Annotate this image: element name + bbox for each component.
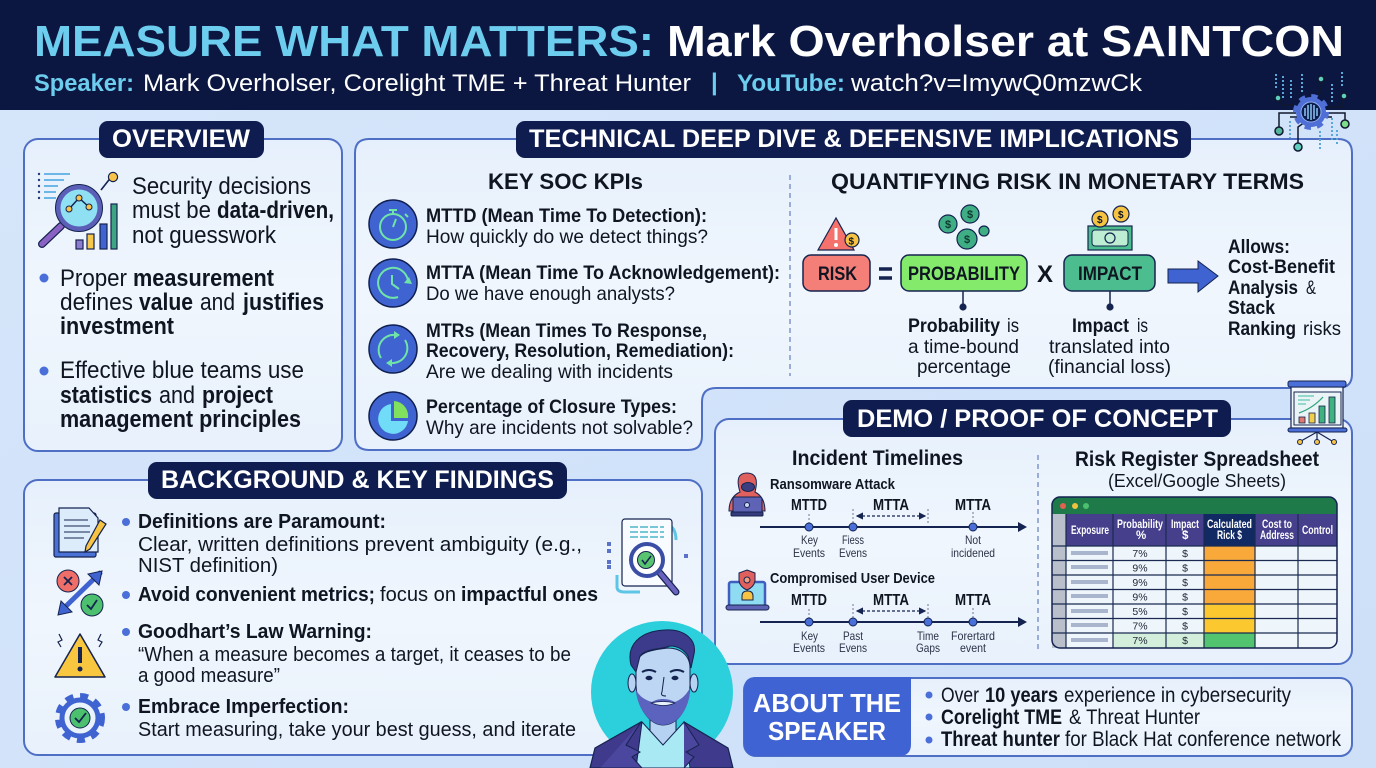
heading: key soc kpis: KEY SOC KPIs (488, 169, 643, 194)
heading: risk register: (Excel/Google Sheets) (1108, 471, 1286, 491)
finding: imperfection: Start measuring, take your best guess, and iterate (138, 719, 576, 741)
text: allows: Ranking (1228, 318, 1296, 340)
timeline: ransomware: Fiess (842, 533, 864, 547)
icon: document review (607, 519, 688, 592)
subtitle: Mark Overholser, Corelight TME + Threat Hunter (143, 70, 691, 97)
bio bullets (926, 684, 1341, 751)
text: allows: Analysis (1228, 277, 1298, 299)
table header labels: Address (1260, 530, 1294, 542)
icon: probability coins (939, 205, 989, 249)
icon: impact money: $ (1097, 215, 1103, 226)
timeline: compromised device: Events (793, 641, 825, 655)
box: impact (1064, 255, 1155, 291)
kpi: mttd (426, 205, 708, 248)
kpi: mtrs (426, 320, 734, 383)
icon: probability coins: $ (967, 209, 973, 221)
bullet: effective blue teams: statistics (60, 382, 152, 409)
table row values (1132, 548, 1188, 647)
text: impact note (1048, 315, 1171, 378)
timeline: compromised device: Gaps (916, 641, 940, 655)
table header labels: $ (1182, 530, 1189, 542)
heading: about the speaker: ABOUT THE (753, 688, 901, 718)
table header labels: % (1136, 530, 1146, 542)
finding: definitions: Definitions are Paramount: (138, 511, 386, 533)
timeline: compromised device: Forertard (951, 629, 995, 643)
bullet: effective blue teams: project (202, 382, 273, 409)
table header labels: Control (1302, 525, 1333, 537)
subtitle: | (711, 69, 718, 96)
kpi: mtta: Do we have enough analysts? (426, 283, 675, 305)
timeline: ransomware: Events (793, 546, 825, 560)
table row values: 7% (1132, 620, 1148, 632)
icon: stopwatch (369, 200, 417, 248)
text: overview intro: not guesswork (132, 222, 277, 249)
table header labels: Exposure (1071, 525, 1109, 537)
title: MEASURE WHAT MATTERS: (34, 17, 654, 66)
timeline: ransomware (760, 497, 1027, 560)
panel: background and key findings (24, 462, 702, 755)
finding: goodhart: Goodhart’s Law Warning: (138, 621, 372, 643)
box: impact: IMPACT (1078, 264, 1142, 285)
timeline: ransomware: MTTA (873, 497, 909, 514)
heading: incident timelines: Incident Timelines (792, 447, 963, 470)
finding: goodhart: “When a measure becomes a target, it ceases to be (138, 644, 571, 666)
timeline: compromised device: Evens (839, 641, 867, 655)
table row values: 7% (1132, 635, 1148, 647)
text: overview intro (132, 173, 334, 249)
table row values: $ (1182, 635, 1188, 647)
icon: probability coins: $ (964, 234, 970, 246)
table row values: 7% (1132, 548, 1148, 560)
bio bullets: 10 years (985, 684, 1058, 707)
title: Mark Overholser at SAINTCON (667, 17, 1344, 66)
heading: risk register: Risk Register Spreadsheet (1075, 448, 1319, 471)
bio bullets: experience in cybersecurity (1064, 684, 1291, 707)
panel: about the speaker (744, 677, 1352, 756)
icon: hacker (729, 473, 765, 516)
heading: overview (99, 121, 264, 158)
text: overview intro: Security decisions (132, 173, 311, 200)
box: probability (901, 255, 1027, 291)
subtitle: watch?v=ImywQ0mzwCk (850, 70, 1143, 97)
timeline: ransomware: MTTA (955, 497, 991, 514)
table row values: $ (1182, 548, 1188, 560)
timeline: compromised device: Key (801, 629, 818, 643)
header banner (0, 0, 1376, 110)
bullet: effective blue teams: and (159, 382, 195, 409)
label: ransomware attack: Ransomware Attack (770, 476, 896, 493)
icon: gear check (58, 696, 102, 740)
icon: gear circuit (1275, 72, 1349, 151)
heading: quantifying risk: QUANTIFYING RISK IN MONETARY TERMS (831, 169, 1304, 194)
icon: presentation monitor (1288, 381, 1347, 444)
icon: impact money (1088, 206, 1132, 250)
icon: risk warning (818, 218, 859, 250)
table row values: 5% (1132, 606, 1148, 618)
text: allows: Allows: (1228, 236, 1290, 258)
heading: about the speaker (744, 677, 911, 756)
finding: imperfection: Embrace Imperfection: (138, 696, 349, 718)
timeline: ransomware: incidened (951, 546, 995, 560)
table row values: 9% (1132, 577, 1148, 589)
finding: definitions (122, 511, 582, 577)
panel: demo proof of concept (715, 400, 1352, 664)
timeline: ransomware: MTTD (791, 497, 827, 514)
finding: convenient metrics (122, 584, 598, 606)
icon: impact money: $ (1118, 210, 1124, 221)
timeline: compromised device: Time (917, 629, 939, 643)
operator: equals (879, 269, 892, 278)
table header labels (1071, 519, 1333, 542)
kpi: mtrs: Recovery, Resolution, Remediation): (426, 340, 734, 362)
table row values: 9% (1132, 562, 1148, 574)
heading: demo (843, 400, 1231, 437)
text: allows (1228, 236, 1341, 340)
timeline: ransomware: Key (801, 533, 818, 547)
connector: impact (1106, 291, 1114, 311)
icon: risk warning: $ (848, 236, 854, 248)
kpi: closure types: Percentage of Closure Types: (426, 396, 677, 418)
finding: convenient metrics: focus on (380, 584, 456, 606)
finding: definitions: NIST definition) (138, 555, 278, 577)
heading: risk register (1075, 448, 1319, 491)
connector: probability (959, 291, 967, 311)
operator: multiply: X (1037, 261, 1053, 288)
table row values: $ (1182, 620, 1188, 632)
heading: background: BACKGROUND & KEY FINDINGS (161, 466, 554, 494)
table row values: $ (1182, 577, 1188, 589)
bullet: proper measurement (40, 265, 324, 340)
timeline: ransomware: Evens (839, 546, 867, 560)
table row values: 9% (1132, 592, 1148, 604)
heading: technical deep dive: TECHNICAL DEEP DIVE & DEFENSIVE IMPLICATIONS (529, 125, 1179, 153)
finding: imperfection (122, 696, 576, 741)
kpi: closure types: Why are incidents not solvable? (426, 417, 693, 439)
table header labels: Probability (1117, 519, 1163, 531)
text: probability note: Probability (908, 315, 1000, 337)
icon: magnifier and chart (38, 172, 118, 249)
heading: about the speaker: SPEAKER (768, 716, 886, 746)
finding: convenient metrics: Avoid convenient metrics; (138, 584, 375, 606)
table: risk register spreadsheet (1052, 497, 1337, 648)
bullet: proper measurement: justifies (242, 289, 324, 316)
arrow: result (1168, 261, 1218, 292)
kpi: mtta: MTTA (Mean Time To Acknowledgement): (426, 262, 780, 284)
text: probability note: a time-bound (908, 336, 1019, 358)
box: risk (803, 255, 870, 291)
bullet: proper measurement: and (200, 289, 235, 316)
portrait: speaker (590, 621, 733, 768)
kpi: mttd: MTTD (Mean Time To Detection): (426, 205, 707, 227)
table row values: $ (1182, 606, 1188, 618)
finding: definitions: Clear, written definitions prevent ambiguity (e.g., (138, 534, 582, 556)
icon: trade-off arrows (57, 570, 103, 616)
bio bullets: Corelight TME (941, 706, 1062, 729)
icon: cycle arrows (369, 325, 417, 373)
text: allows: & (1306, 277, 1316, 299)
kpi: mtrs: MTRs (Mean Times To Response, (426, 320, 707, 342)
timeline: compromised device: event (960, 641, 987, 655)
bullet: effective blue teams: management principles (60, 406, 301, 433)
table row values: $ (1182, 562, 1188, 574)
heading: overview: OVERVIEW (112, 125, 250, 153)
box: risk: RISK (818, 264, 857, 285)
text: probability note (908, 315, 1019, 378)
table header labels: Calculated (1207, 519, 1252, 531)
panel: overview (24, 121, 342, 451)
kpi: mtrs: Are we dealing with incidents (426, 361, 673, 383)
icon: warning triangle (55, 634, 105, 677)
icon: probability coins: $ (945, 219, 951, 231)
bullet: effective blue teams: Effective blue teams use (60, 357, 304, 384)
text: impact note: (financial loss) (1048, 356, 1171, 378)
timeline: compromised device: MTTD (791, 592, 827, 609)
box: probability: PROBABILITY (908, 264, 1020, 285)
subtitle: YouTube: (737, 70, 845, 97)
bullet: proper measurement: Proper (60, 265, 127, 292)
title (34, 17, 1344, 66)
text: allows: risks (1303, 318, 1341, 340)
bio bullets: & Threat Hunter (1069, 706, 1200, 729)
timeline: ransomware: Not (965, 533, 982, 547)
bullet: effective blue teams (40, 357, 304, 433)
text: probability note: percentage (917, 356, 1011, 378)
bullet: proper measurement: investment (60, 313, 174, 340)
timeline: compromised device: MTTA (873, 592, 909, 609)
table header labels: Impact (1171, 519, 1199, 531)
bio bullets: for Black Hat conference network (1065, 728, 1341, 751)
timeline: compromised device: Past (843, 629, 864, 643)
panel: technical deep dive (355, 121, 1352, 450)
timeline: compromised device: MTTA (955, 592, 991, 609)
finding: convenient metrics: impactful ones (461, 584, 598, 606)
text: impact note: translated into (1049, 336, 1170, 358)
kpi: mtta (426, 262, 780, 305)
timeline: compromised device (760, 592, 1027, 655)
finding: goodhart (122, 621, 571, 687)
finding: goodhart: a good measure” (138, 665, 280, 687)
bullet: proper measurement: defines (60, 289, 133, 316)
text: impact note: Impact (1072, 315, 1129, 337)
kpi: mttd: How quickly do we detect things? (426, 226, 708, 248)
icon: documents (54, 508, 106, 557)
icon: clock (369, 259, 417, 307)
kpi: closure types (426, 396, 693, 439)
label: compromised user device: Compromised User Device (770, 570, 935, 587)
subtitle: Speaker: (34, 70, 134, 97)
table header labels: Cost to (1262, 519, 1292, 531)
text: impact note: is (1137, 315, 1148, 337)
text: probability note: is (1007, 315, 1019, 337)
bio bullets: Threat hunter (941, 728, 1060, 751)
bio bullets: Over (941, 684, 979, 707)
table header labels: Rick $ (1217, 530, 1242, 542)
text: overview intro: data-driven, (217, 197, 334, 224)
icon: compromised laptop (726, 570, 769, 610)
bullet: proper measurement: value (139, 289, 193, 316)
heading: demo: DEMO / PROOF OF CONCEPT (857, 405, 1218, 433)
icon: pie chart (369, 392, 417, 440)
text: allows: Stack (1228, 297, 1275, 319)
text: allows: Cost-Benefit (1228, 256, 1335, 278)
text: overview intro: must be (132, 197, 211, 224)
subtitle (34, 69, 1143, 97)
bullet: proper measurement: measurement (133, 265, 274, 292)
table row values: $ (1182, 592, 1188, 604)
